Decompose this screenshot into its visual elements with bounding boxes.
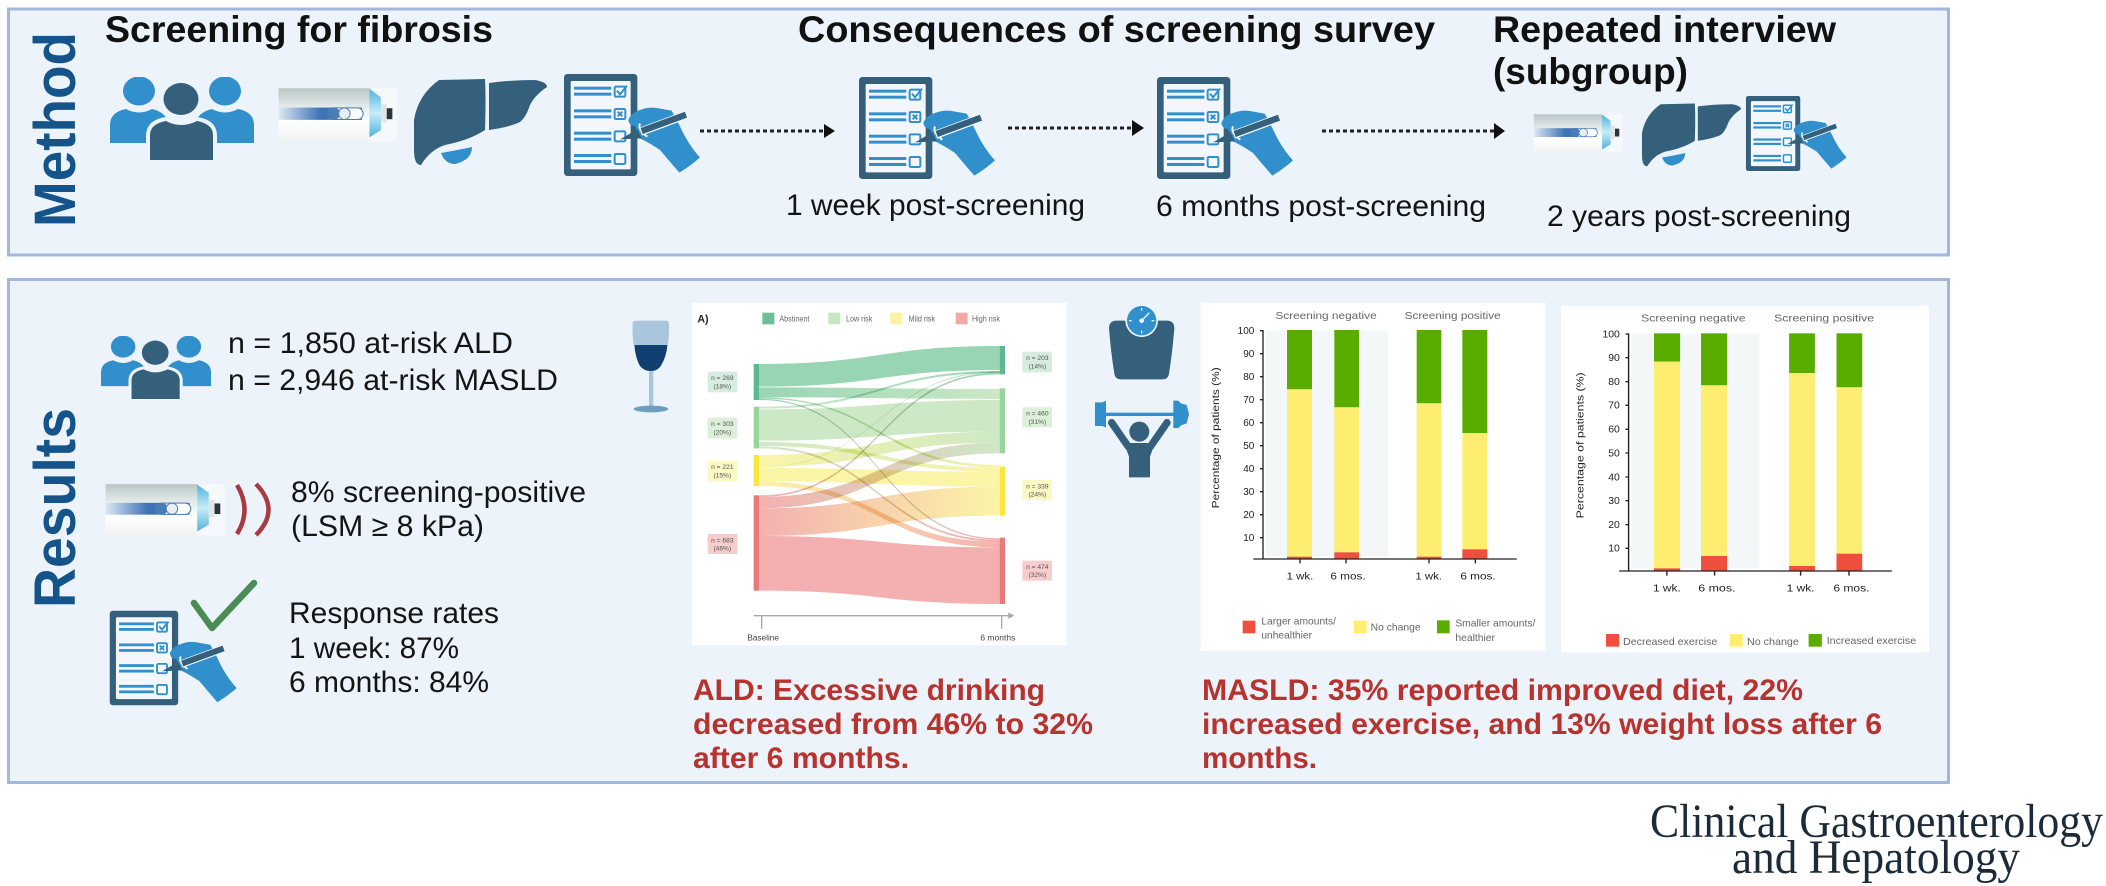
text: response rates: 6 months: 84% [289,666,489,699]
legend: risk groups: Abstinent [779,315,810,324]
axes [1211,326,1517,582]
panel: method [8,8,1948,255]
legend: Decreased exercise [1623,637,1718,648]
six-month labels: (32%) [1028,572,1046,579]
heading: Results: Results [23,408,88,608]
six-month labels: n = 460 [1026,411,1049,418]
axes: 40 [1243,464,1255,475]
heading: Method: Method [23,32,88,227]
label: 2 years post-screening: 2 years post-screening [1547,200,1851,233]
callout: ALD result: ALD: Excessive drinking [693,674,1045,707]
time axis [747,612,1015,643]
axes: 6 mos. [1833,584,1870,595]
six-month labels [1022,352,1052,581]
axes: 1 wk. [1653,584,1681,595]
six-month labels: (14%) [1028,364,1046,371]
text: sample sizes: n = 1,850 at-risk ALD [228,327,513,360]
icon: survey 1 week [859,77,995,179]
legend: No change [1371,623,1421,634]
callout: MASLD result: months. [1202,742,1317,775]
stacked bars [1654,333,1862,571]
six-month nodes [1000,346,1005,604]
heading: consequences of screening survey: Consequences of screening survey [798,8,1435,50]
time axis: 6 months [980,634,1015,643]
arrow: to 6 months [1008,120,1144,136]
icon: small survey [1746,96,1847,171]
legend: No change [1747,637,1799,648]
baseline labels: n = 683 [711,537,734,544]
axes: 70 [1243,395,1255,406]
six-month labels: n = 339 [1026,483,1049,490]
axes: 50 [1243,441,1255,452]
legend [1243,616,1536,644]
legend: Larger amounts/ [1261,616,1336,627]
panel titles: Screening positive [1774,313,1874,325]
arrow: to 1 week [700,124,835,138]
legend: Smaller amounts/ [1455,619,1536,630]
baseline labels: n = 221 [711,464,734,471]
baseline labels: (20%) [713,430,731,437]
axes: 90 [1243,349,1255,360]
six-month labels: (24%) [1028,491,1046,498]
panel titles [1641,313,1874,325]
legend: unhealthier [1261,631,1313,642]
icon: people [110,76,254,162]
callout: MASLD result: increased exercise, and 13% weight loss after 6 [1202,708,1882,741]
axes: 6 mos. [1330,571,1366,582]
icon: elastography probe [279,88,397,141]
axes: 20 [1243,510,1255,521]
legend: risk groups: A) [697,313,709,325]
axes: 40 [1608,473,1620,483]
text: response rates: 1 week: 87% [289,632,459,665]
axes: 30 [1608,496,1620,507]
chart: alcohol sankey [692,303,1067,645]
legend [1606,634,1917,648]
icon: small liver [1642,103,1741,166]
icon: people [101,336,211,401]
icon: liver [414,79,547,165]
arrow: to 2 years [1322,123,1505,139]
six-month labels: n = 474 [1026,564,1049,571]
heading: repeated interview subgroup: Repeated interview [1493,8,1837,50]
axes: 100 [1602,330,1620,340]
callout: MASLD result [1202,674,1882,775]
six-month labels: (31%) [1028,419,1046,426]
baseline nodes [754,364,759,591]
axes: 90 [1608,353,1620,364]
axes: Percentage of patients (%) [1211,367,1222,508]
axes: 20 [1608,520,1620,531]
legend: risk groups: Mild risk [909,315,935,324]
axes: 30 [1243,487,1255,498]
axes: 6 mos. [1698,584,1735,595]
callout: MASLD result: MASLD: 35% reported improved diet, 22% [1202,674,1803,707]
icon: probe with signal waves [106,484,268,536]
axes: 60 [1608,425,1620,436]
panel titles: Screening negative [1275,311,1377,322]
axes: 6 mos. [1460,571,1496,582]
axes: 100 [1238,326,1255,337]
axes: 1 wk. [1287,571,1313,582]
panel titles: Screening positive [1405,311,1501,322]
axes: 1 wk. [1415,571,1442,582]
text: sample sizes: n = 2,946 at-risk MASLD [228,364,558,397]
axes: 50 [1608,449,1620,459]
time axis: Baseline [747,634,780,643]
legend: Increased exercise [1827,636,1917,647]
text: response rates: Response rates [289,597,499,630]
legend: risk groups: Low risk [846,315,872,324]
icon: survey with hand [110,611,237,705]
axes: 10 [1243,533,1255,544]
journal logo: and Hepatology [1732,831,2020,884]
legend: risk groups [697,313,1000,325]
six-month labels: n = 203 [1026,355,1049,362]
icon: survey with hand [564,74,700,176]
baseline labels [708,372,737,554]
axes: 80 [1608,377,1620,388]
axes: 60 [1243,418,1255,429]
icon: wine glass [632,321,669,412]
chart: MASLD exercise [1561,306,1929,652]
axes: 80 [1243,372,1255,383]
chart: MASLD diet [1201,303,1546,651]
legend: risk groups: High risk [972,315,1000,324]
heading: screening for fibrosis: Screening for fibrosis [105,8,493,50]
callout: ALD result: after 6 months. [693,742,909,775]
text: screening positive: (LSM ≥ 8 kPa) [291,510,484,543]
icon: weighing scale [1109,304,1174,379]
icon: survey 6 months [1157,77,1293,179]
panel: results [8,280,1948,782]
text: screening positive [291,476,586,543]
axes: 70 [1608,401,1620,412]
legend: healthier [1455,633,1496,644]
heading: repeated interview subgroup [1493,8,1837,92]
text: screening positive: 8% screening-positive [291,476,586,509]
text: response rates [289,597,499,699]
baseline labels: n = 303 [711,421,734,428]
icon: small probe [1534,114,1623,152]
sankey flows [759,346,1000,604]
baseline labels: n = 269 [711,375,734,382]
journal logo [1650,795,2103,884]
axes: 1 wk. [1787,584,1815,595]
panel titles [1275,311,1501,322]
axes [1576,330,1892,595]
baseline labels: (15%) [713,473,731,480]
icon: weightlifter [1095,401,1189,477]
icon: check mark [194,583,254,628]
callout: ALD result: decreased from 46% to 32% [693,708,1093,741]
panel titles: Screening negative [1641,313,1746,325]
axes: 10 [1608,544,1620,555]
heading: repeated interview subgroup: (subgroup) [1493,50,1688,92]
axes: Percentage of patients (%) [1576,372,1587,518]
label: 1 week post-screening: 1 week post-screening [786,189,1085,222]
callout: ALD result [693,674,1093,775]
stacked bars [1287,330,1487,559]
baseline labels: (18%) [713,384,731,391]
text: sample sizes [228,327,558,397]
baseline labels: (46%) [713,546,731,553]
label: 6 months post-screening: 6 months post-screening [1156,190,1486,223]
